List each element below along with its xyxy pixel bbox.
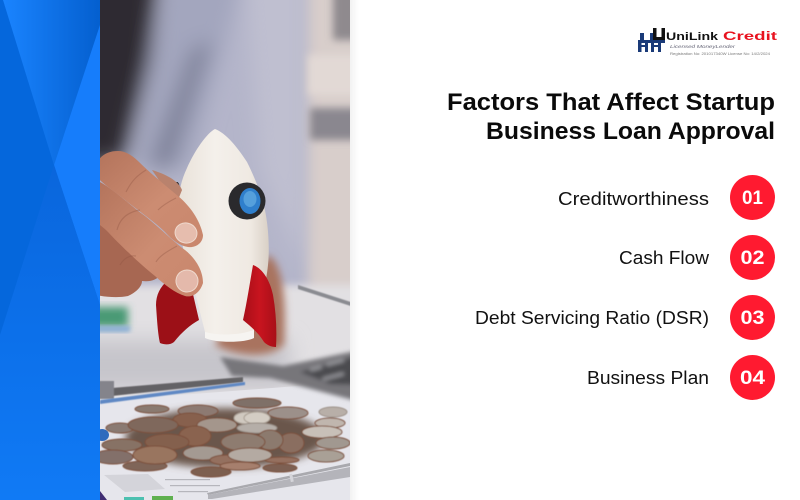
badge 04 (730, 355, 775, 400)
rocket body (179, 129, 269, 334)
photo: calculator (220, 350, 360, 402)
badge 03 (730, 295, 775, 340)
logo mark (638, 33, 665, 52)
third finger (100, 225, 158, 298)
logo mark black U (653, 28, 665, 40)
logo tagline: Licensed MoneyLender (670, 44, 736, 49)
photo right edge shadow (350, 0, 359, 500)
logo: Unilink Credit: Credit (723, 29, 777, 43)
finger nails (174, 222, 198, 244)
logo registration: Registration No: 201017340W License No: 14/2/2024 (670, 51, 771, 56)
list item 2: Cash Flow (619, 235, 775, 280)
photo: blurred hand behind rocket (215, 255, 285, 355)
rocket right fin (243, 265, 276, 347)
photo: coin pile (93, 398, 350, 477)
photo: blurred pen at right (298, 284, 350, 306)
rocket porthole (228, 182, 266, 220)
badge 02 (730, 235, 775, 280)
badge 02: 02 (740, 248, 764, 269)
logo: Unilink Credit (638, 28, 777, 56)
photo: silver pen on paper (207, 463, 350, 499)
list item 1: Creditworthiness: Creditworthiness (558, 189, 709, 209)
photo: desk and papers (100, 282, 350, 500)
logo name: UniLink (666, 31, 719, 43)
list item 2: Cash Flow: Cash Flow (619, 248, 710, 268)
title (447, 89, 775, 145)
back finger (152, 170, 182, 197)
badge 01: 01 (742, 188, 763, 209)
knuckle creases (117, 170, 177, 265)
badge 01 (730, 175, 775, 220)
list item 3: Debt Servicing Ratio (DSR): Debt Servicing Ratio (DSR) (475, 308, 709, 328)
title: Business Loan Approval (486, 118, 775, 145)
badge 03: 03 (740, 308, 764, 329)
rocket nozzle (205, 330, 254, 342)
photo: rocket (156, 129, 276, 347)
rocket left fin (156, 280, 199, 344)
photo: fingers (96, 151, 203, 297)
list item 4: Business Plan (587, 355, 775, 400)
photo: paper print detail (95, 429, 220, 500)
photo background: blurred shirt and room (100, 0, 350, 290)
index finger (96, 151, 203, 247)
badge 04: 04 (740, 368, 766, 389)
panel: blue geometric band (0, 0, 100, 500)
title: Factors That Affect Startup (447, 89, 775, 116)
list item 1: Creditworthiness (558, 175, 775, 220)
list item 3: Debt Servicing Ratio (DSR) (475, 295, 775, 340)
rocket back porthole edge (176, 182, 180, 186)
list item 4: Business Plan: Business Plan (587, 368, 709, 388)
second finger (96, 180, 203, 296)
panel: photo of rocket and coins (100, 0, 350, 500)
